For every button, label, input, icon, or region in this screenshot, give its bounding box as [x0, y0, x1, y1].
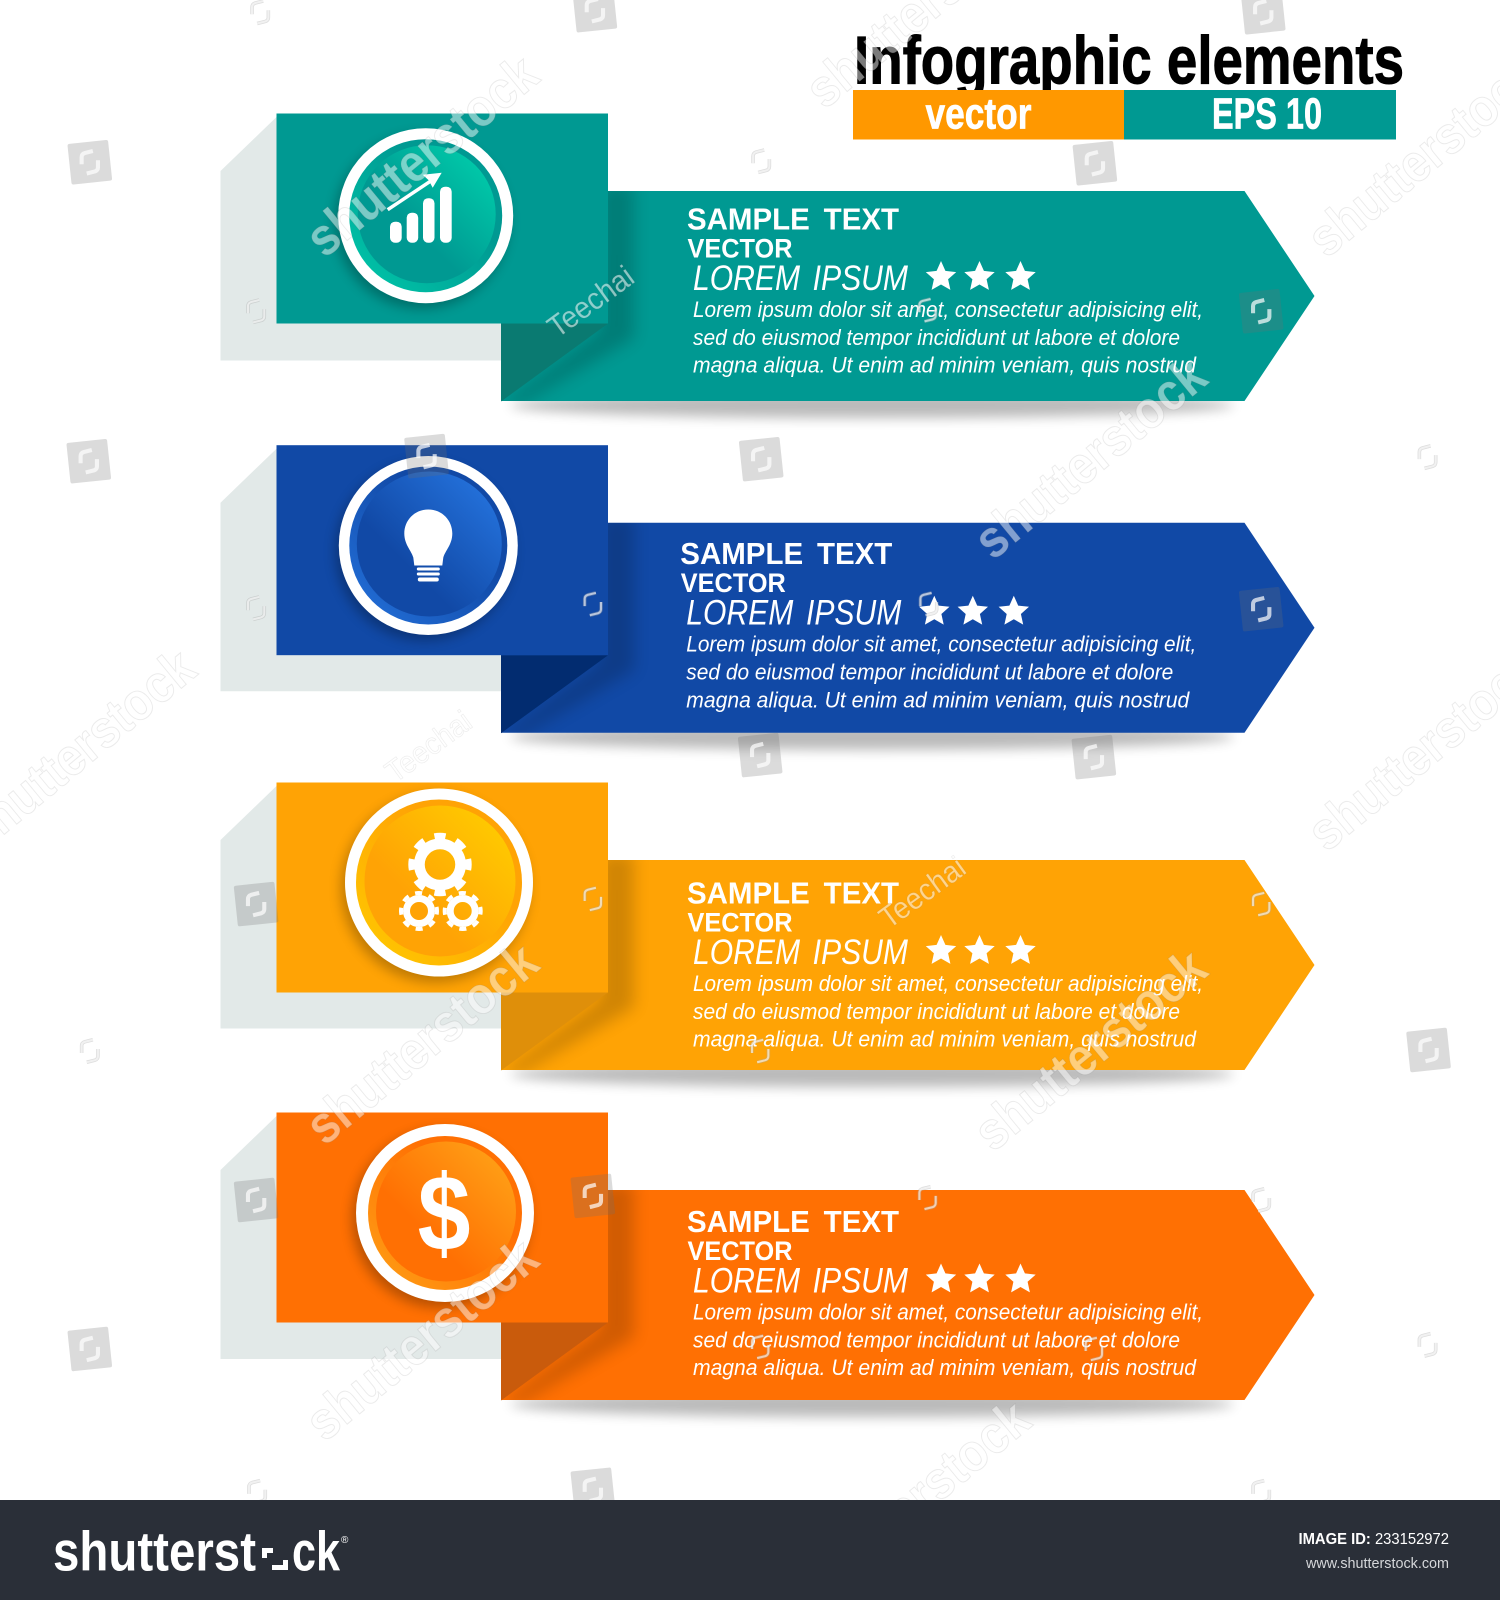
- panel: row 4 orange: [220, 1112, 1314, 1417]
- text block: magna aliqua. Ut enim ad minim veniam, quis nostrud: [693, 353, 1197, 378]
- fold shadow: [500, 517, 634, 737]
- text block: SAMPLE TEXT: [687, 876, 899, 910]
- text block: SAMPLE TEXT: [687, 1204, 899, 1239]
- text block: magna aliqua. Ut enim ad minim veniam, quis nostrud: [693, 1027, 1197, 1052]
- icon: dollar sign in circle: [352, 1124, 534, 1308]
- shutterstock logo: ®: [341, 1535, 349, 1546]
- watermarks: shutterstock: [295, 1227, 550, 1452]
- text block: VECTOR: [688, 907, 792, 937]
- arrow banner: [501, 1190, 1314, 1400]
- fold triangle: [501, 655, 608, 733]
- fold shadow: [500, 854, 634, 1074]
- EPS 10 tag: EPS 10: [1212, 90, 1322, 138]
- back shadow: [220, 117, 501, 360]
- text block: sed do eiusmod tempor incididunt ut labore et dolore: [693, 325, 1180, 350]
- icon: three stars: [926, 935, 1036, 964]
- arrow under-shadow: [510, 1391, 1234, 1417]
- text block: LOREM IPSUM: [693, 1262, 909, 1300]
- text block: VECTOR: [681, 568, 786, 598]
- panel: row 3 amber: [220, 782, 1314, 1087]
- text block: Lorem ipsum dolor sit amet, consectetur adipisicing elit,: [693, 297, 1203, 322]
- icon square: [276, 782, 608, 992]
- icon: gears in circle: [341, 788, 533, 982]
- text block: magna aliqua. Ut enim ad minim veniam, quis nostrud: [686, 687, 1190, 712]
- back shadow: [220, 786, 501, 1028]
- text block: [680, 536, 1196, 712]
- watermarks: Teechai: [541, 259, 641, 344]
- back shadow: [220, 449, 501, 691]
- fold shadow: [500, 185, 634, 405]
- text block: LOREM IPSUM: [693, 259, 909, 298]
- icon square: [276, 445, 608, 655]
- text block: magna aliqua. Ut enim ad minim veniam, quis nostrud: [693, 1355, 1197, 1380]
- icon: light bulb in circle: [335, 456, 518, 640]
- shutterstock logo: ck: [292, 1520, 341, 1582]
- icon square: [276, 1112, 608, 1322]
- panel: row 1 teal: [220, 114, 1314, 418]
- fold shadow: [500, 1184, 634, 1404]
- watermarks: shutterstock: [963, 937, 1218, 1162]
- icon: dollar sign in circle: $: [418, 1152, 470, 1273]
- arrow under-shadow: [510, 1061, 1234, 1087]
- text block: sed do eiusmod tempor incididunt ut labore et dolore: [686, 660, 1173, 685]
- text block: VECTOR: [688, 1236, 792, 1266]
- text block: SAMPLE TEXT: [680, 536, 892, 571]
- text block: [687, 1204, 1203, 1380]
- text block: sed do eiusmod tempor incididunt ut labore et dolore: [693, 1328, 1180, 1352]
- icon: three stars: [926, 261, 1036, 290]
- shutterstock logo: shutterst: [53, 1520, 256, 1582]
- fold triangle: [501, 1322, 608, 1400]
- subtitle bar: [853, 90, 1396, 140]
- text block: sed do eiusmod tempor incididunt ut labore et dolore: [693, 999, 1180, 1024]
- panel: row 2 blue: [220, 445, 1314, 750]
- arrow banner: [501, 191, 1314, 401]
- icon square: [276, 114, 608, 324]
- watermarks: shutterstock: [295, 931, 550, 1156]
- text block: [687, 202, 1203, 378]
- icon: three stars: [926, 1264, 1036, 1292]
- text block: LOREM IPSUM: [693, 933, 909, 972]
- arrow under-shadow: [510, 724, 1234, 750]
- text block: LOREM IPSUM: [686, 594, 902, 633]
- footer bar: [0, 1500, 1500, 1600]
- watermarks: Teechai: [873, 850, 972, 935]
- watermarks: Teechai: [379, 704, 478, 789]
- image id: IMAGE ID: 233152972: [1298, 1531, 1449, 1548]
- watermarks: shutterstock: [963, 346, 1218, 570]
- icon: rising bar chart in circle: [335, 128, 513, 309]
- text block: SAMPLE TEXT: [687, 202, 899, 236]
- text block: Lorem ipsum dolor sit amet, consectetur adipisicing elit,: [686, 632, 1196, 657]
- back shadow: [220, 1116, 501, 1359]
- vector tag: [853, 90, 1124, 140]
- arrow under-shadow: [510, 392, 1234, 418]
- fold triangle: [501, 992, 608, 1070]
- watermarks: shutterstock: [295, 43, 550, 268]
- icon: three stars: [919, 596, 1029, 625]
- vector tag: vector: [926, 90, 1032, 138]
- text block: Lorem ipsum dolor sit amet, consectetur adipisicing elit,: [693, 1300, 1203, 1324]
- EPS 10 tag: [1124, 90, 1396, 140]
- text block: Lorem ipsum dolor sit amet, consectetur adipisicing elit,: [693, 971, 1203, 996]
- arrow banner: [501, 860, 1314, 1070]
- text block: [687, 876, 1203, 1052]
- website: www.shutterstock.com: [1305, 1555, 1449, 1572]
- arrow banner: [501, 523, 1314, 733]
- text block: VECTOR: [688, 233, 792, 263]
- fold triangle: [501, 324, 608, 402]
